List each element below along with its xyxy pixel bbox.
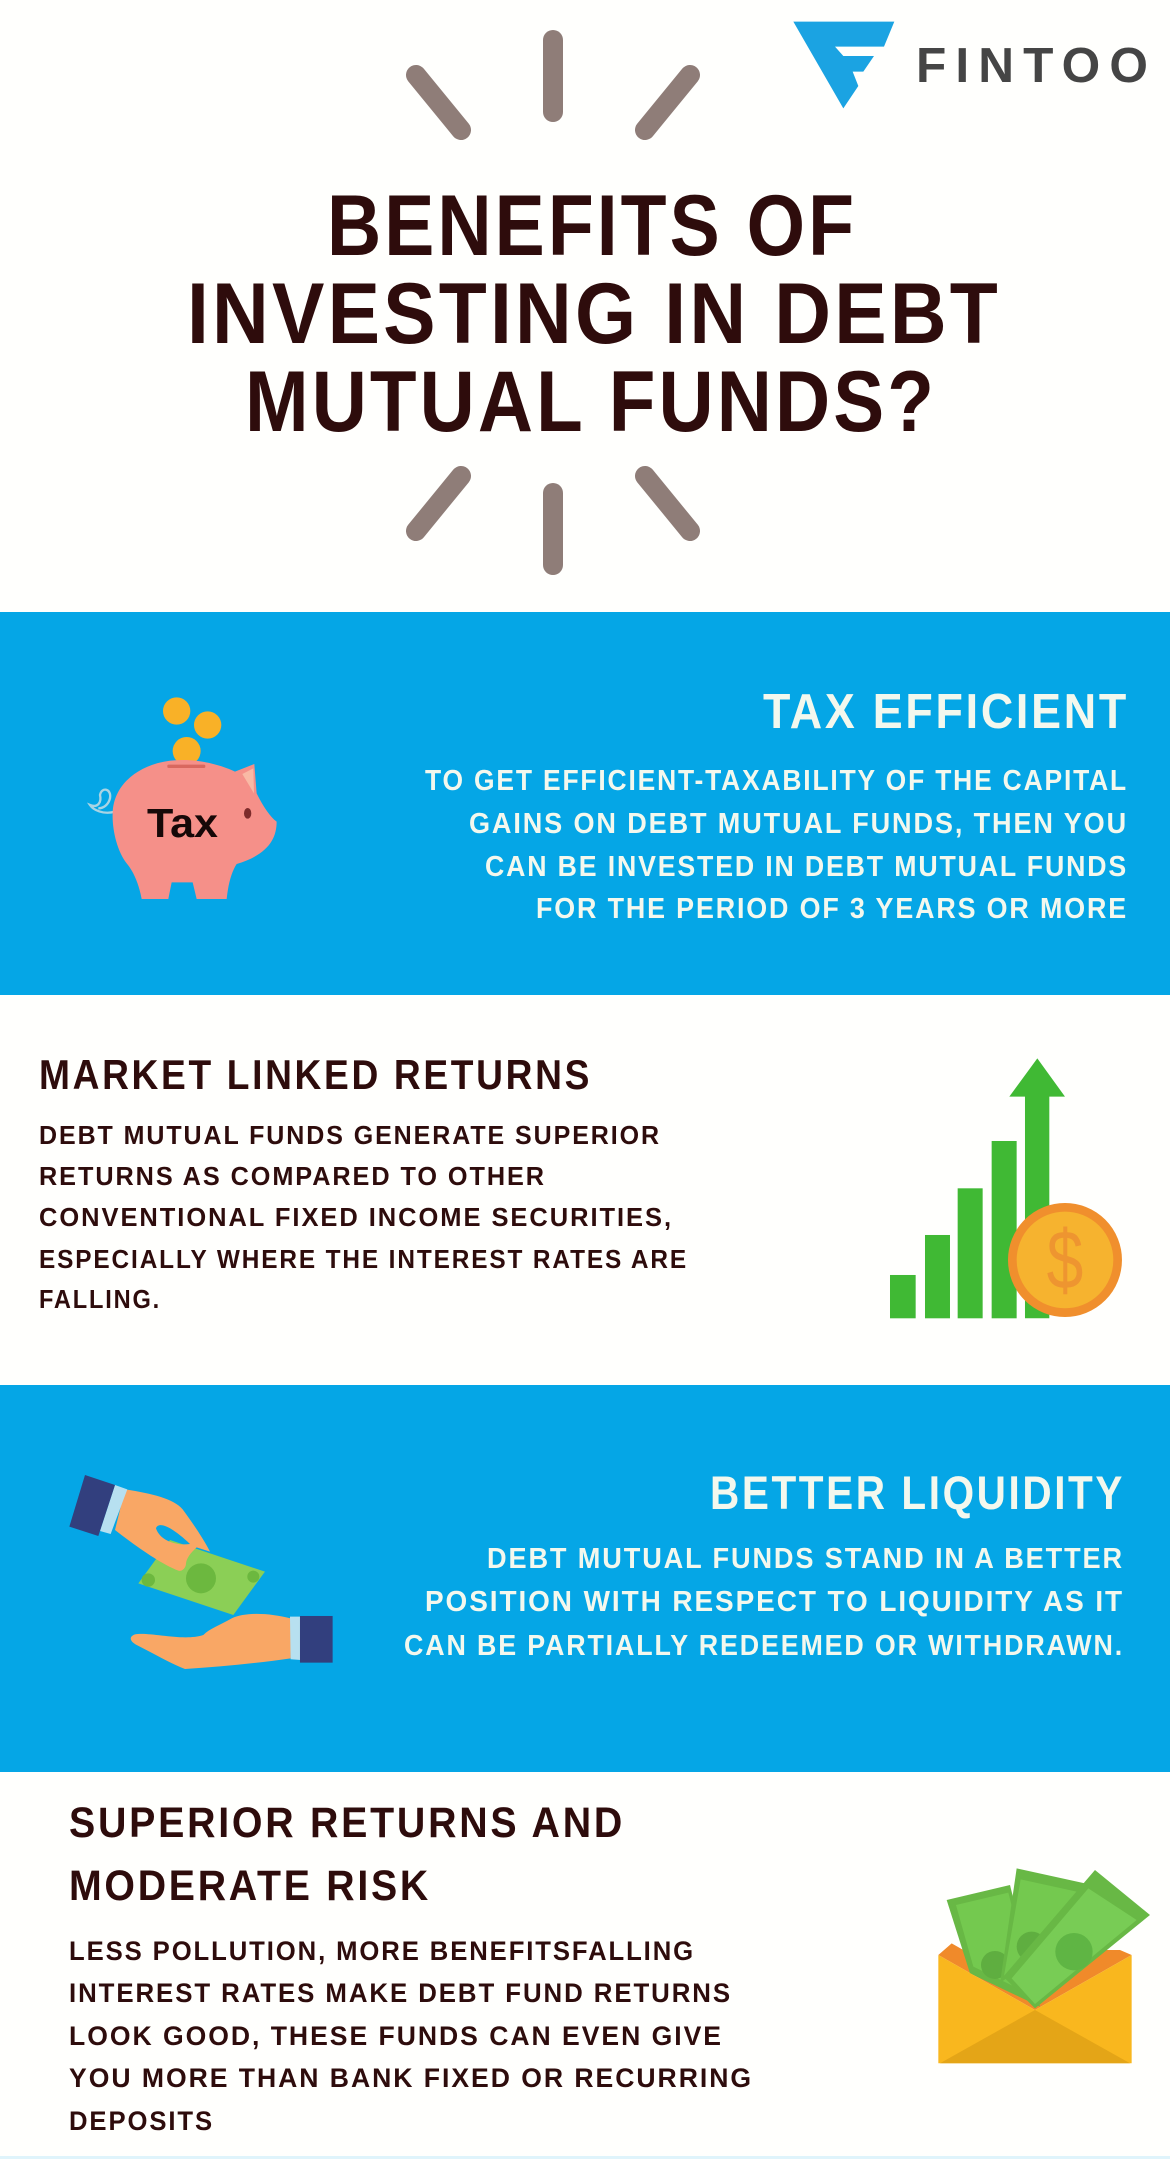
- heading: MARKET LINKED RETURNS: [39, 1051, 592, 1098]
- body text: [39, 1120, 688, 1314]
- body text: LOOK GOOD, THESE FUNDS CAN EVEN GIVE: [69, 2021, 723, 2051]
- decorative rays below title: [416, 476, 690, 565]
- title: INVESTING IN DEBT: [187, 266, 1001, 362]
- piggy bank label: Tax: [147, 800, 218, 846]
- panel: superior returns and moderate risk: [69, 1799, 1150, 2136]
- decorative rays above title: [416, 40, 690, 130]
- body text: GAINS ON DEBT MUTUAL FUNDS, THEN YOU: [469, 808, 1128, 840]
- heading: SUPERIOR RETURNS AND: [69, 1799, 625, 1847]
- body text: INTEREST RATES MAKE DEBT FUND RETURNS: [69, 1978, 732, 2008]
- body text: FOR THE PERIOD OF 3 YEARS OR MORE: [536, 893, 1128, 925]
- heading: TAX EFFICIENT: [763, 685, 1129, 739]
- title: [187, 178, 1001, 450]
- body text: LESS POLLUTION, MORE BENEFITSFALLING: [69, 1936, 695, 1966]
- logo wordmark: FINTOO: [916, 39, 1157, 93]
- icon: growth chart with coin: $: [1047, 1213, 1083, 1306]
- body text: DEBT MUTUAL FUNDS STAND IN A BETTER: [487, 1543, 1124, 1575]
- body text: DEPOSITS: [69, 2106, 214, 2136]
- panel: tax efficient: [0, 612, 1170, 995]
- body text: CONVENTIONAL FIXED INCOME SECURITIES,: [39, 1202, 673, 1232]
- body text: CAN BE PARTIALLY REDEEMED OR WITHDRAWN.: [404, 1630, 1124, 1662]
- body text: ESPECIALLY WHERE THE INTEREST RATES ARE: [39, 1244, 688, 1274]
- icon: envelope with banknotes: [938, 1868, 1150, 2063]
- icon: piggy bank with coins: [90, 697, 277, 899]
- heading: [69, 1799, 625, 1910]
- body text: FALLING.: [39, 1284, 161, 1314]
- panel: market linked returns: [39, 1051, 1118, 1318]
- body text: POSITION WITH RESPECT TO LIQUIDITY AS IT: [425, 1586, 1124, 1618]
- logo: Fintoo: [793, 22, 1157, 108]
- body text: RETURNS AS COMPARED TO OTHER: [39, 1161, 546, 1191]
- title: BENEFITS OF: [327, 178, 857, 274]
- body text: YOU MORE THAN BANK FIXED OR RECURRING: [69, 2063, 753, 2093]
- heading: MODERATE RISK: [69, 1862, 431, 1910]
- icon: hands exchanging money: [69, 1475, 333, 1669]
- title: MUTUAL FUNDS?: [245, 354, 937, 450]
- body text: [69, 1936, 753, 2136]
- body text: DEBT MUTUAL FUNDS GENERATE SUPERIOR: [39, 1120, 661, 1150]
- body text: [425, 765, 1128, 925]
- icon: growth chart with coin: [890, 1058, 1118, 1318]
- bottom edge: [0, 2156, 1170, 2159]
- panel: better liquidity: [0, 1385, 1170, 1772]
- body text: CAN BE INVESTED IN DEBT MUTUAL FUNDS: [485, 851, 1128, 883]
- icon: Fintoo triangle mark: [793, 22, 894, 108]
- body text: [404, 1543, 1124, 1662]
